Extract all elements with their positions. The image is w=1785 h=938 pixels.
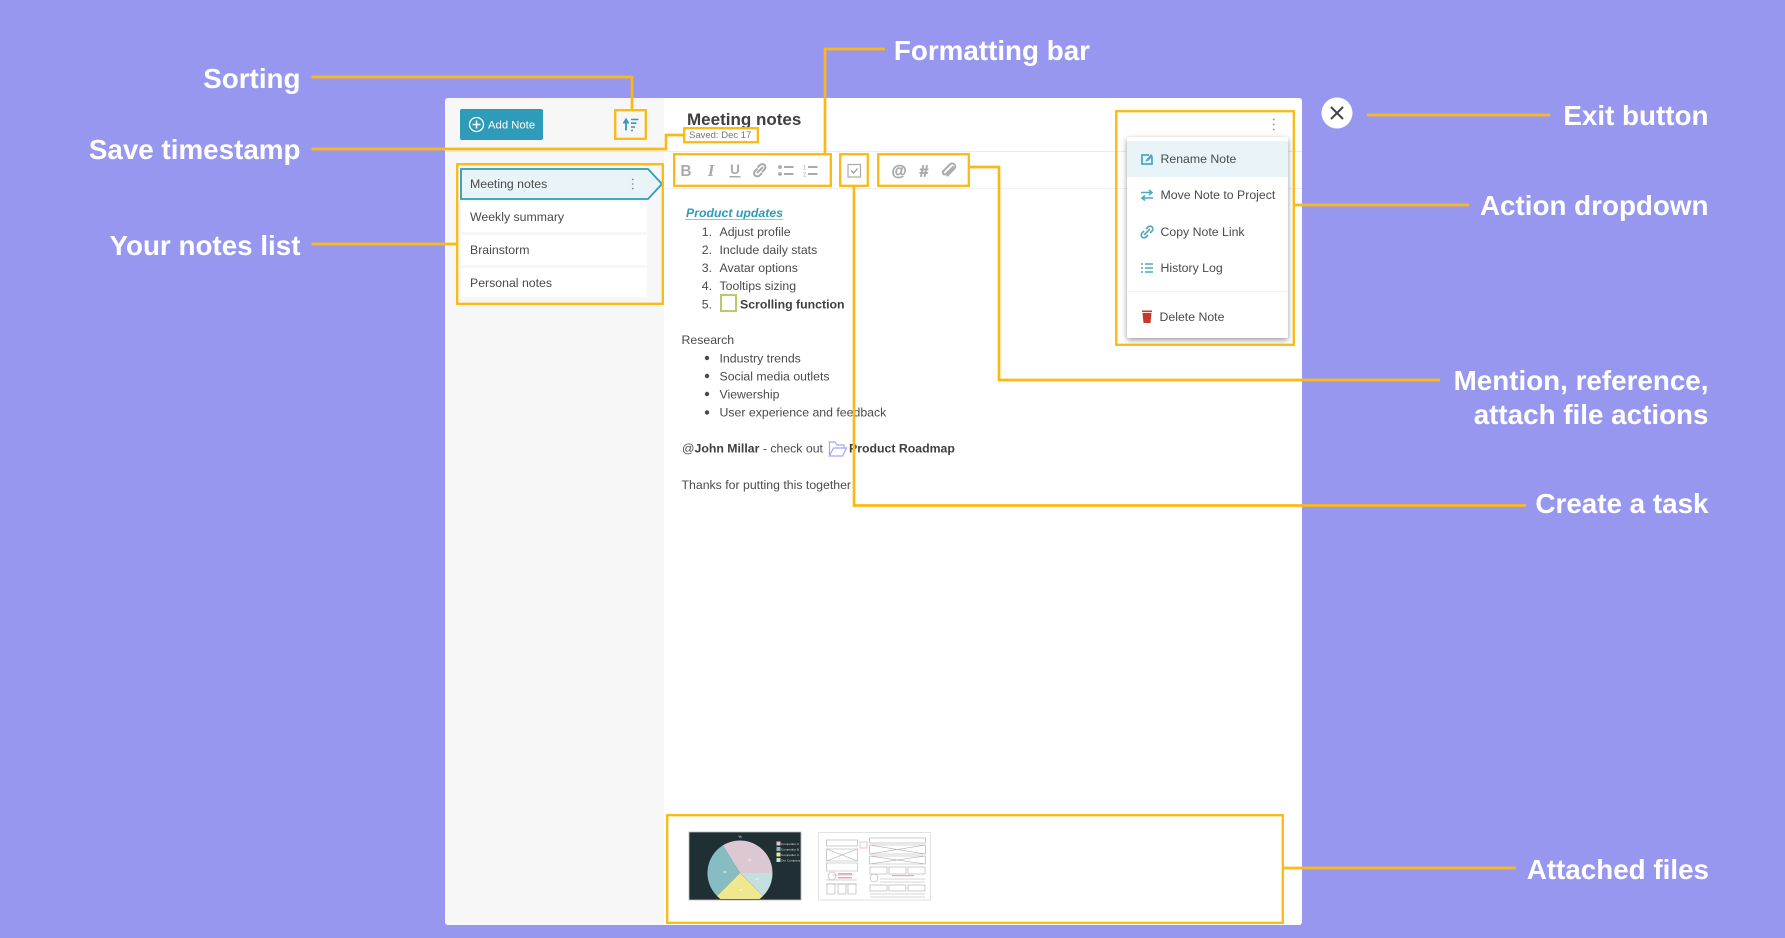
toolbar dividers	[664, 151, 1302, 189]
icon: task checkbox	[848, 164, 860, 177]
note item: Weekly summary	[461, 202, 647, 232]
numbered list: 4.	[702, 279, 712, 293]
note item: Brainstorm	[461, 235, 647, 265]
thumbnail: pie chart: 28	[723, 870, 727, 874]
thumbnail: pie chart: Our Company	[781, 858, 801, 862]
mention line	[682, 442, 955, 456]
note item: Meeting notes (selected): Meeting notes	[470, 177, 547, 191]
mention line: @John Millar - check out	[682, 442, 824, 456]
thumbnail: pie chart	[689, 832, 801, 906]
numbered list: 3.	[702, 261, 712, 275]
note item: Personal notes: Personal notes	[470, 276, 552, 290]
note item: Weekly summary: Weekly summary	[470, 210, 565, 224]
numbered list: Tooltips sizing	[720, 279, 796, 293]
numbered list: 5.	[702, 298, 712, 312]
thumbnail: pie chart: 34	[748, 858, 752, 862]
research list: Industry trends	[720, 352, 801, 366]
icons: mention, reference, attach: @	[891, 163, 907, 180]
callout: Sorting	[203, 63, 646, 139]
numbered list: Adjust profile	[720, 225, 791, 239]
save timestamp text: Saved: Dec 17	[689, 130, 751, 141]
menu item: delete note: Delete Note	[1160, 310, 1225, 324]
callout: Create a task	[840, 154, 1709, 519]
callout: Formatting bar	[674, 35, 1090, 186]
icons: formatting toolbar	[680, 161, 818, 180]
thumbnail: wireframe	[818, 832, 930, 900]
callout: Exit button: Exit button	[1563, 100, 1708, 131]
callout: Mention, reference, attach file actions	[878, 154, 1708, 430]
thumbnail: pie chart: 27	[739, 888, 743, 892]
note item: Personal notes	[461, 268, 647, 297]
icons: mention, reference, attach: #	[920, 164, 929, 180]
thumbnail: pie chart: 11	[755, 877, 758, 881]
research list	[682, 333, 887, 420]
note item: Meeting notes (selected)	[461, 169, 662, 199]
icons: formatting toolbar: I	[707, 161, 716, 180]
numbered list	[702, 225, 845, 312]
research list: Research	[682, 333, 734, 347]
icons: formatting toolbar: U	[730, 162, 740, 177]
callout: Create a task: Create a task	[1535, 488, 1709, 519]
panel: notes window	[445, 98, 1302, 925]
numbered list: 1.	[702, 225, 712, 239]
note item: Brainstorm: Brainstorm	[470, 243, 529, 257]
thumbnail: pie chart: Competitor B	[781, 848, 799, 852]
research list: Viewership	[720, 388, 780, 402]
thumbnail: pie chart: %	[738, 834, 742, 839]
icon: sort	[624, 120, 638, 130]
kebab menu icon	[1273, 119, 1275, 130]
callout: Formatting bar: Formatting bar	[894, 35, 1090, 66]
callout: Save timestamp	[89, 128, 758, 165]
callout: Action dropdown	[1116, 111, 1708, 345]
thumbnail: pie chart: Competitor C	[781, 853, 800, 857]
numbered list: Avatar options	[720, 261, 798, 275]
callout: Action dropdown: Action dropdown	[1480, 190, 1708, 221]
button: add note: Add Note	[488, 120, 535, 132]
numbered list: Include daily stats	[720, 243, 817, 257]
icons: formatting toolbar: 1	[803, 166, 807, 172]
note title: Meeting notes	[687, 110, 801, 129]
callout: Attached files	[667, 815, 1709, 923]
numbered list: 2.	[702, 243, 712, 257]
panel: sidebar	[445, 98, 664, 925]
heading: Product updates: Product updates	[686, 206, 783, 220]
callout: Save timestamp: Save timestamp	[89, 134, 300, 165]
menu item: move note to project: Move Note to Project	[1160, 188, 1276, 202]
callout: Your notes list: Your notes list	[110, 230, 300, 261]
callout: Attached files: Attached files	[1527, 854, 1709, 885]
callout: Your notes list	[110, 164, 663, 304]
callout: Mention, reference, attach file actions: Mention, reference,	[1454, 365, 1708, 396]
mention line: Product Roadmap	[849, 442, 955, 456]
icons: formatting toolbar: B	[680, 163, 692, 180]
icon: exit button	[1322, 98, 1352, 128]
menu item: rename note: Rename Note	[1160, 152, 1237, 166]
research list: Social media outlets	[720, 370, 830, 384]
callout: Sorting: Sorting	[203, 63, 300, 94]
thumbnail: pie chart: Competitor A	[781, 842, 800, 846]
callout: Mention, reference, attach file actions: attach file actions	[1474, 399, 1708, 430]
menu item: copy note link: Copy Note Link	[1160, 225, 1245, 239]
action dropdown menu	[1127, 137, 1288, 338]
numbered list: Scrolling function	[740, 298, 845, 312]
icons: mention, reference, attach	[891, 163, 955, 180]
research list: User experience and feedback	[720, 406, 887, 420]
note body text	[682, 206, 955, 492]
closing line: Thanks for putting this together	[682, 478, 851, 492]
button: add note	[460, 109, 543, 140]
icons: formatting toolbar: 2	[803, 172, 807, 178]
menu item: history log: History Log	[1160, 261, 1223, 275]
